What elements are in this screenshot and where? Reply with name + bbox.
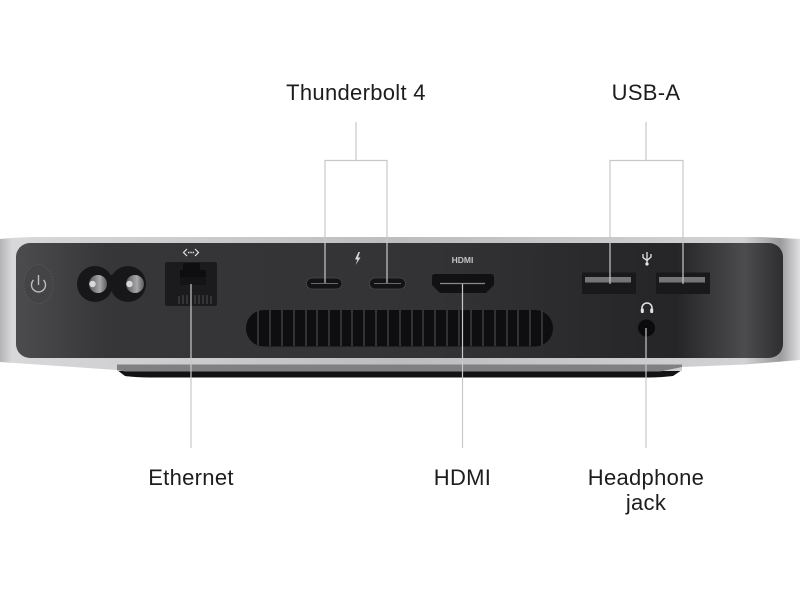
label: Ethernet: Ethernet (148, 465, 234, 490)
icon: Thunderbolt (355, 252, 360, 265)
icon: Ethernet (184, 249, 198, 256)
Ethernet port (165, 262, 217, 306)
headphone jack (638, 320, 655, 336)
HDMI port (432, 274, 494, 293)
lower chassis shadow band (117, 364, 682, 372)
silver chassis (0, 237, 800, 371)
USB-A ports (582, 272, 710, 294)
leader lines: Thunderbolt 4 (325, 122, 387, 283)
label: USB-A: USB-A (612, 80, 680, 105)
icon: USB (643, 252, 651, 265)
label: HDMI port mark: HDMI (452, 255, 473, 265)
Thunderbolt ports (306, 278, 406, 289)
label: HDMI: HDMI (434, 465, 491, 490)
device body (0, 237, 800, 378)
leader line: HDMI (462, 284, 464, 448)
leader line: Headphone jack (645, 328, 647, 448)
dark rear panel (16, 243, 783, 358)
icon: headphones (641, 303, 653, 313)
label: Headphone jack: jack (625, 490, 667, 515)
leader line: Ethernet (190, 284, 192, 448)
power button (24, 264, 53, 304)
label: Thunderbolt 4: Thunderbolt 4 (286, 80, 426, 105)
base foot (117, 370, 682, 378)
label: Headphone jack: Headphone (588, 465, 704, 490)
vent (246, 310, 553, 346)
power socket (77, 266, 146, 302)
leader lines: USB-A (610, 122, 683, 284)
